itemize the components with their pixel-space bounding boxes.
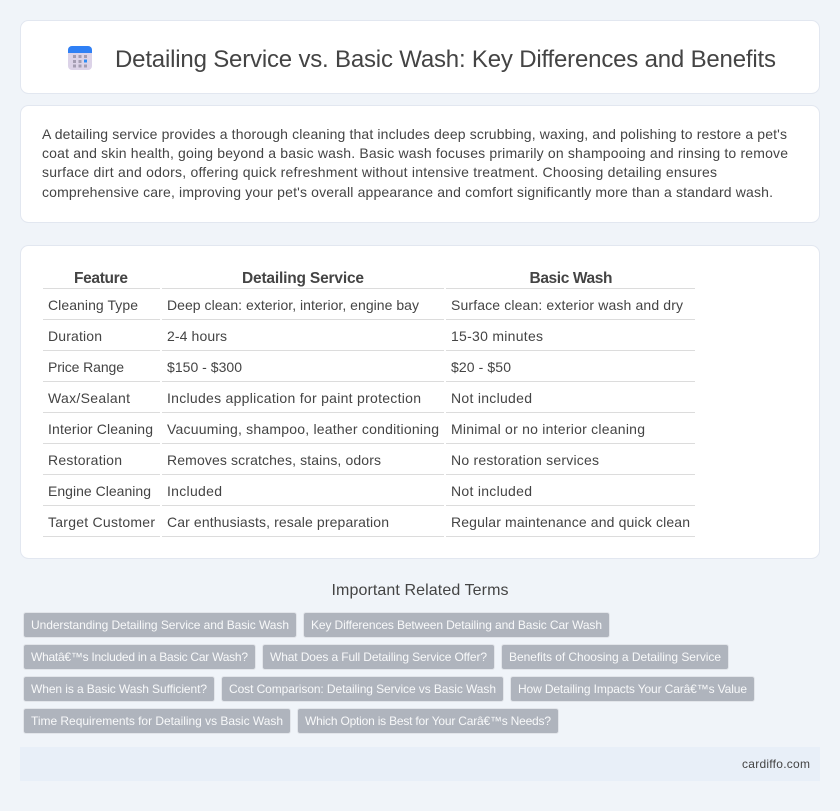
row: interior cleaning (48, 421, 645, 437)
tag: What Does a Full Detailing Service Offer? (270, 650, 487, 664)
row: cleaning type (48, 297, 683, 313)
tag: Key Differences Between Detailing and Basic Car Wash (311, 618, 602, 632)
row: wax/sealant: Not included (451, 390, 532, 406)
row: target customer: Target Customer (48, 514, 155, 530)
tag (502, 644, 728, 670)
tag (222, 676, 504, 702)
row: wax/sealant (48, 390, 532, 406)
icon: calendar (68, 46, 92, 70)
row: duration: Duration (48, 328, 102, 344)
row: interior cleaning: Minimal or no interior cleaning (451, 421, 645, 437)
tag (24, 708, 290, 734)
tag (24, 612, 296, 638)
text block: description (42, 126, 788, 200)
row: cleaning type: Surface clean: exterior wash and dry (451, 297, 683, 313)
row: restoration (48, 452, 599, 468)
row: cleaning type: Cleaning Type (48, 297, 138, 313)
row: engine cleaning: Engine Cleaning (48, 483, 151, 499)
row: restoration: Removes scratches, stains, odors (167, 452, 381, 468)
row: price range: $150 - $300 (167, 359, 242, 375)
table header: Detailing Service (242, 270, 364, 287)
tag: How Detailing Impacts Your Carâ€™s Value (518, 682, 747, 696)
row: restoration: Restoration (48, 452, 122, 468)
tag: Time Requirements for Detailing vs Basic Wash (31, 714, 283, 728)
row: engine cleaning: Not included (451, 483, 532, 499)
row: target customer: Car enthusiasts, resale preparation (167, 514, 389, 530)
tag: Whatâ€™s Included in a Basic Car Wash? (31, 650, 248, 664)
row: engine cleaning: Included (167, 483, 222, 499)
row: duration: 2-4 hours (167, 328, 227, 344)
table header (74, 270, 612, 287)
row: price range: $20 - $50 (451, 359, 511, 375)
table header: Feature (74, 270, 128, 287)
related terms tags (24, 612, 754, 734)
table header: Basic Wash (530, 270, 612, 287)
row: interior cleaning: Vacuuming, shampoo, leather conditioning (167, 421, 439, 437)
text block: description: comprehensive care, improving your pet's overall appearance and comfort significantly more than a standard wash. (42, 184, 773, 200)
row: interior cleaning: Interior Cleaning (48, 421, 153, 437)
tag (304, 612, 610, 638)
text block: description: coat and skin health, going beyond a basic wash. Basic wash focuses primarily on shampooing and rinsing to remove (42, 145, 788, 161)
tag (24, 644, 256, 670)
panel: title card (20, 20, 820, 94)
row: price range (48, 359, 511, 375)
tag (24, 676, 214, 702)
text block: description: A detailing service provides a thorough cleaning that includes deep scrubbing, waxing, and polishing to restore a pet's (42, 126, 787, 142)
row: restoration: No restoration services (451, 452, 599, 468)
footer: cardiffo.com (742, 757, 810, 771)
panel: intro paragraph (20, 106, 820, 222)
tag: Benefits of Choosing a Detailing Service (509, 650, 721, 664)
row: wax/sealant: Wax/Sealant (48, 390, 130, 406)
heading: related terms: Important Related Terms (332, 582, 508, 599)
tag: Understanding Detailing Service and Basic Wash (31, 618, 289, 632)
tag: Which Option is Best for Your Carâ€™s Needs? (305, 714, 551, 728)
tag (510, 676, 754, 702)
title: Detailing Service vs. Basic Wash: Key Differences and Benefits (115, 46, 776, 73)
tag: Cost Comparison: Detailing Service vs Basic Wash (229, 682, 496, 696)
row: target customer (48, 514, 690, 530)
row: price range: Price Range (48, 359, 124, 375)
tag (298, 708, 558, 734)
row: engine cleaning (48, 483, 532, 499)
footer (20, 747, 820, 781)
row: target customer: Regular maintenance and quick clean (451, 514, 690, 530)
row: duration: 15-30 minutes (451, 328, 543, 344)
row: duration (48, 328, 543, 344)
tag: When is a Basic Wash Sufficient? (31, 682, 207, 696)
row: wax/sealant: Includes application for paint protection (167, 390, 421, 406)
text block: description: surface dirt and odors, offering quick refreshment without intensive treatment. Choosing detailing ensures (42, 164, 717, 180)
row: cleaning type: Deep clean: exterior, interior, engine bay (167, 297, 419, 313)
panel: comparison table (20, 246, 820, 558)
tag (262, 644, 494, 670)
